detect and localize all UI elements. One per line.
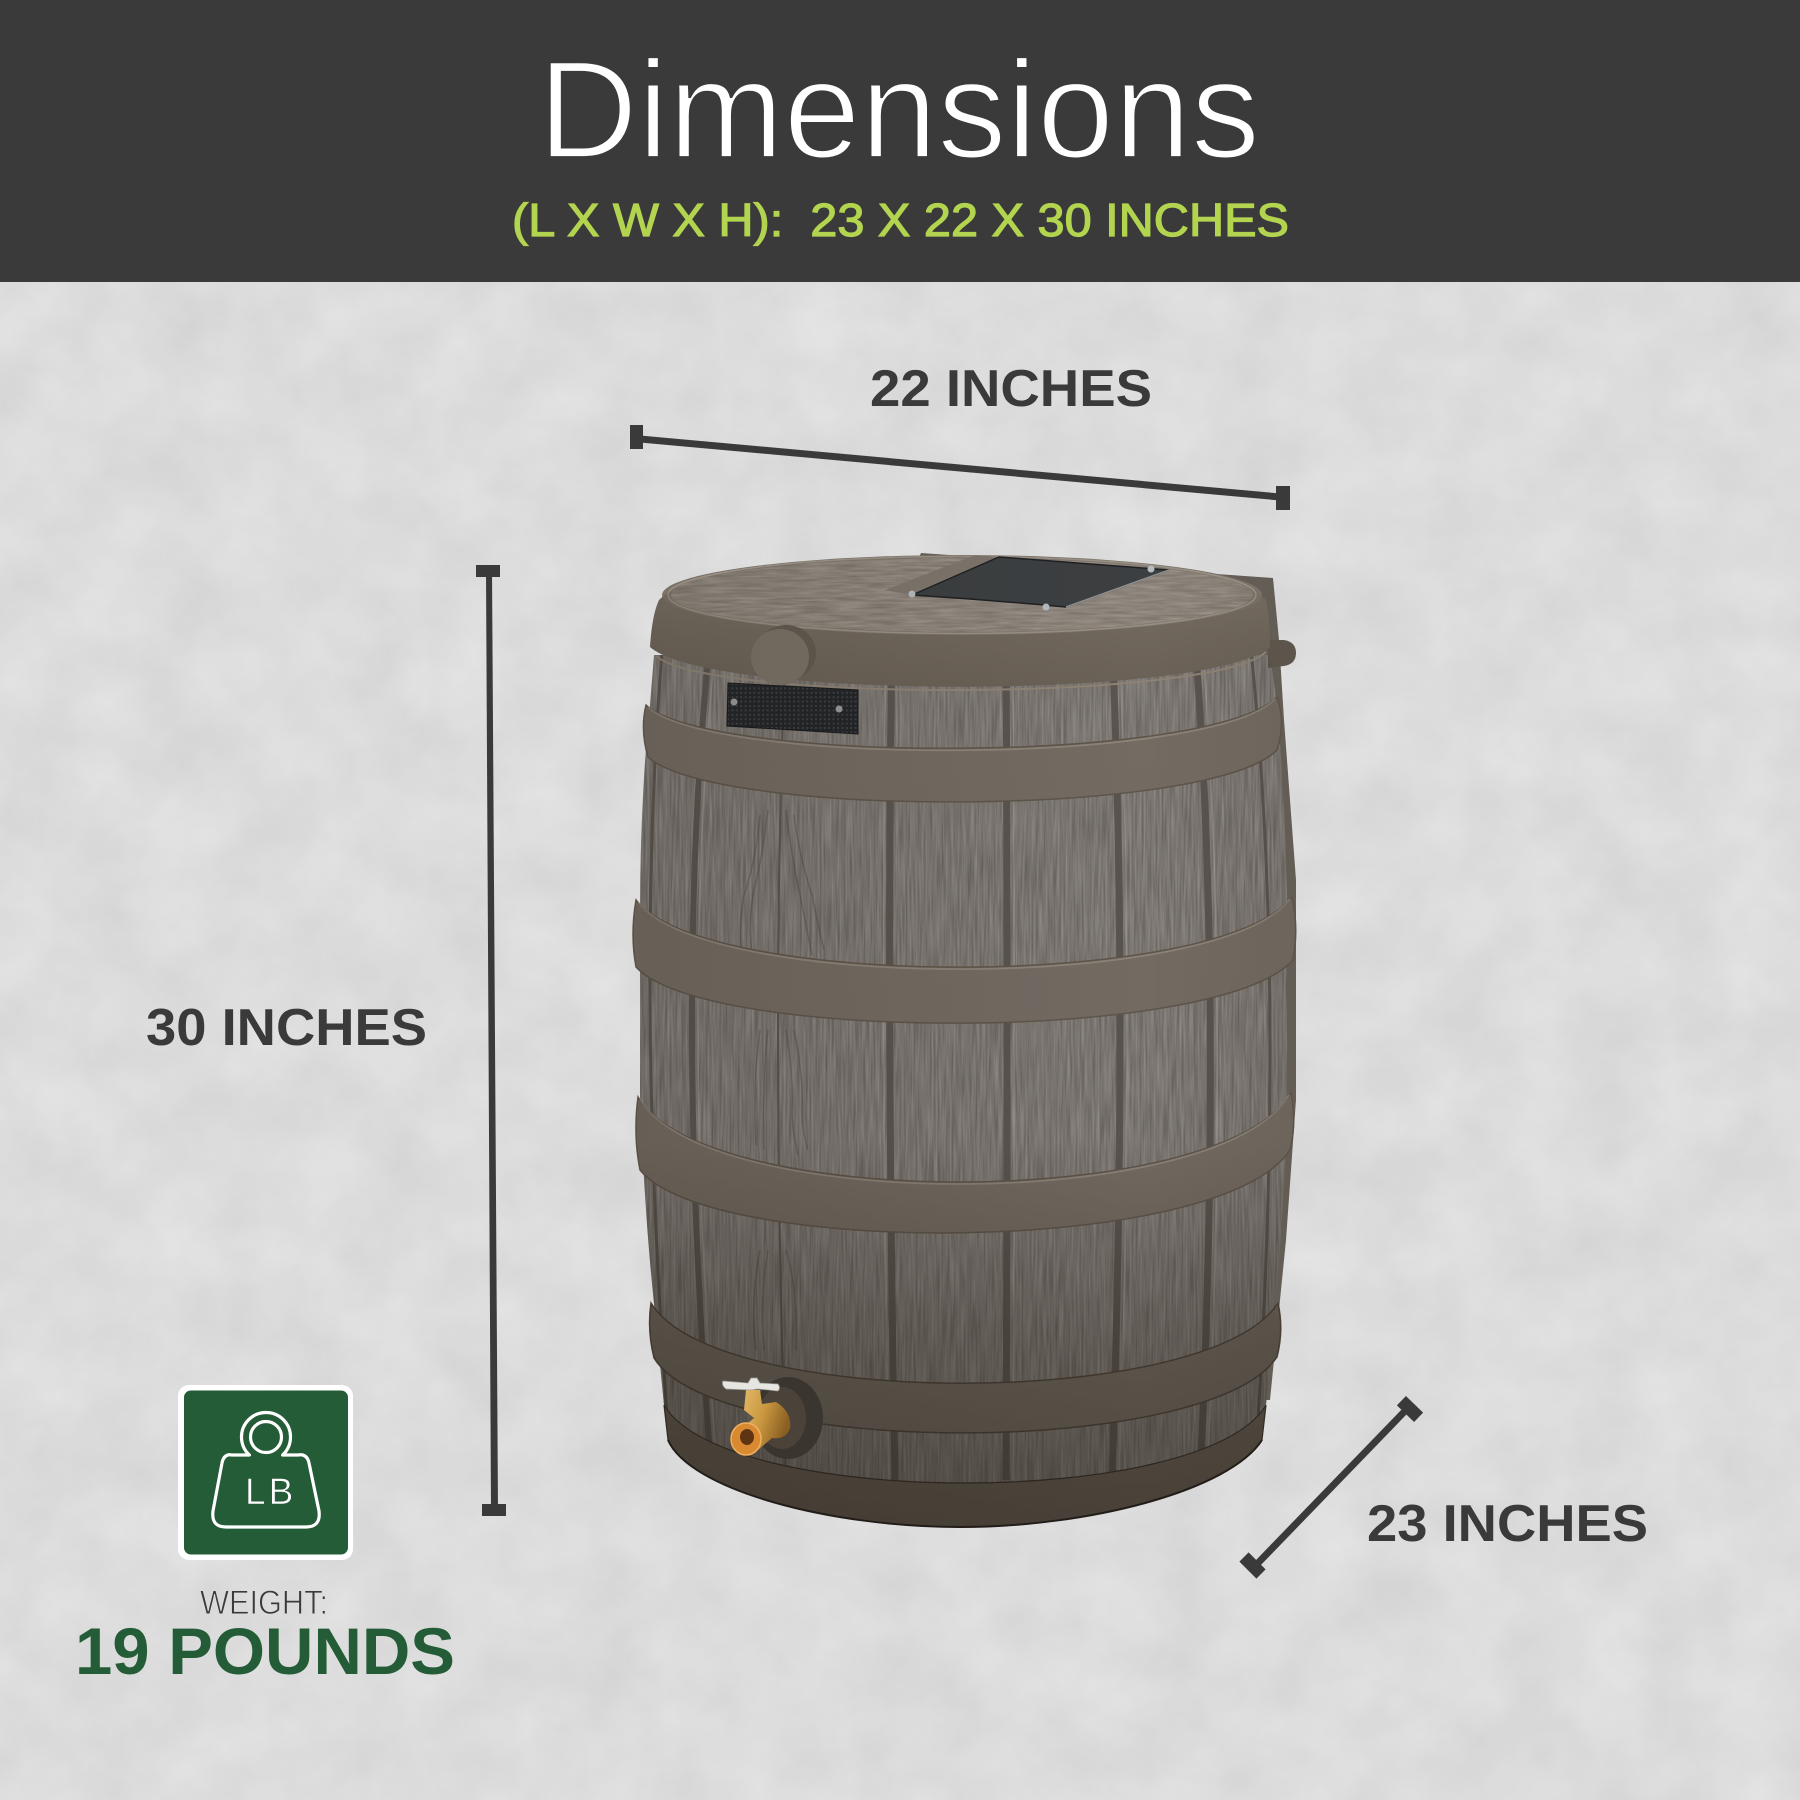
spigot nozzle [731, 1423, 761, 1455]
hoop 3 [636, 1093, 1294, 1233]
stave gaps [650, 640, 1270, 1480]
depth label: 23 INCHES [1367, 1495, 1648, 1553]
height measure line [476, 565, 506, 1516]
barrel staves [640, 655, 1287, 1482]
weight value: 19 POUNDS [75, 1614, 455, 1688]
overflow knob on lid [751, 625, 816, 685]
bottom edge shadow [668, 1440, 1262, 1527]
weight callout [75, 1385, 455, 1688]
lid edge line [656, 652, 1266, 690]
subtitle: overall dimensions: (L X W X H): 23 X 22 X 30 INCHES [512, 194, 1289, 246]
spigot [722, 1377, 823, 1459]
spigot flange [753, 1377, 823, 1459]
hoop 4 [650, 1303, 1281, 1433]
depth dimension [1244, 1401, 1648, 1574]
bottom base ring [664, 1405, 1266, 1527]
title: Dimensions [538, 32, 1260, 188]
screen strip behind debris filter [885, 555, 1000, 595]
wood knot grain [740, 810, 824, 1350]
lid inner rim line [668, 556, 1256, 634]
screen screws [908, 566, 1154, 610]
hoop highlights [638, 699, 1290, 1184]
width label: 22 INCHES [870, 360, 1152, 418]
width dimension [630, 360, 1290, 510]
spigot stem [740, 1390, 790, 1450]
weight label: WEIGHT: [200, 1584, 328, 1622]
width measure line [630, 425, 1290, 510]
hoop 2 [633, 897, 1296, 1023]
rain barrel [620, 550, 1320, 1540]
mesh plate [727, 683, 858, 734]
barrel rear panel [900, 553, 1296, 1400]
depth measure line [1244, 1401, 1419, 1574]
height dimension [146, 565, 506, 1516]
shading overlay [620, 550, 1320, 1535]
debris screen [908, 557, 1169, 610]
spigot handle [722, 1378, 780, 1391]
lid top surface [671, 558, 1253, 632]
icon: weight [178, 1385, 353, 1560]
hoop 1 [643, 697, 1282, 802]
lid side [650, 556, 1270, 687]
height label: 30 INCHES [146, 999, 427, 1057]
icon: weight: LB [245, 1471, 296, 1512]
stave highlights [698, 640, 1217, 1480]
right side pipe stub [1268, 640, 1296, 668]
header banner [0, 0, 1800, 282]
lid rim [662, 555, 1262, 635]
